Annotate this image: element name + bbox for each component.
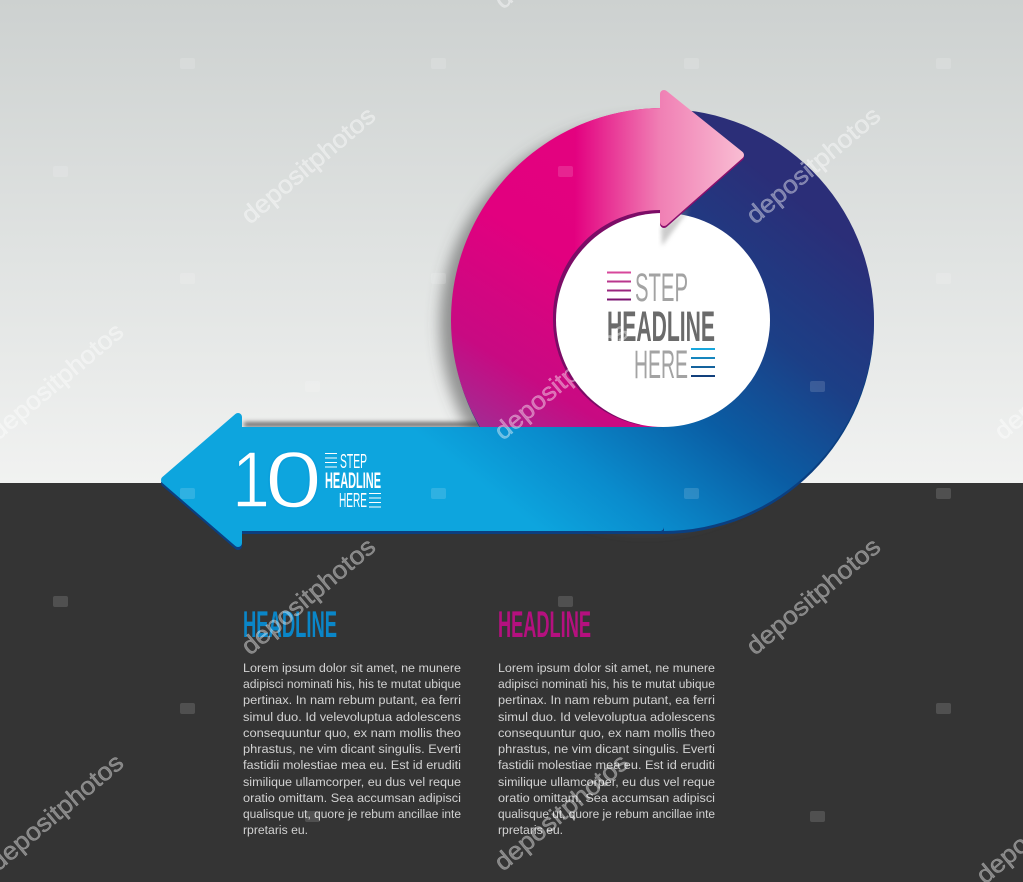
- left body text: Lorem ipsum dolor sit amet, ne munere: [243, 661, 461, 675]
- left body text: similique ullamcorper, eu dus vel reque: [243, 775, 461, 789]
- center label: [607, 266, 715, 387]
- left body text: pertinax. In nam rebum putant, ea ferri: [243, 693, 461, 707]
- left body text: [243, 661, 461, 837]
- center label: HERE: [634, 343, 688, 387]
- shadow under arrow head: [661, 208, 690, 246]
- pink arrow neck: [575, 108, 660, 245]
- left body text: oratio omittam. Sea accumsan adipisci: [243, 791, 461, 805]
- background: dark lower area: [0, 483, 1023, 882]
- right body text: phrastus, ne vim dicant singulis. Everti: [498, 742, 715, 756]
- watermarks: depositphotos: [489, 748, 634, 877]
- right body text: oratio omittam. Sea accumsan adipisci: [498, 791, 715, 805]
- blue ring: [452, 109, 874, 531]
- white inner circle: [556, 213, 770, 427]
- left body text: simul duo. Id velevoluptua adolescens: [243, 710, 461, 724]
- pink arrow head: [664, 94, 740, 222]
- ring lower edge: [452, 112, 874, 534]
- watermarks: depositphotos: [741, 532, 886, 661]
- pink arrow head edge: [664, 96, 740, 224]
- bars right of here: [691, 349, 715, 376]
- watermarks: depositphotos: [489, 317, 634, 446]
- right body text: rpretaris eu.: [498, 823, 563, 837]
- right body text: consequuntur quo, ex nam mollis theo: [498, 726, 715, 740]
- number ten: 1: [232, 435, 270, 524]
- step text: STEP: [635, 266, 688, 310]
- watermark camera icons: [53, 58, 951, 822]
- right text column: [498, 604, 715, 837]
- bars left of step: [607, 272, 631, 300]
- left body text: fastidii molestiae mea eu. Est id eruditi: [243, 758, 461, 772]
- right body text: fastidii molestiae mea eu. Est id eruditi: [498, 758, 715, 772]
- right body text: qualisque ut, quore je rebum ancillae inte: [498, 807, 715, 821]
- pink ring segment: [451, 108, 663, 427]
- right body text: simul duo. Id velevoluptua adolescens: [498, 710, 715, 724]
- arrow label: [232, 435, 381, 524]
- blue left arrow: [165, 417, 660, 543]
- small bars right: [369, 494, 381, 507]
- small here text: HERE: [339, 490, 367, 512]
- text: HEADLINE: [607, 303, 715, 351]
- shadow of circle: [440, 120, 850, 530]
- watermarks: depositphotos: [236, 532, 381, 661]
- right body text: pertinax. In nam rebum putant, ea ferri: [498, 693, 715, 707]
- right body text: adipisci nominati his, his te mutat ubique: [498, 677, 715, 691]
- right body text: [498, 661, 715, 837]
- right body text: similique ullamcorper, eu dus vel reque: [498, 775, 715, 789]
- left body text: phrastus, ne vim dicant singulis. Everti: [243, 742, 461, 756]
- left body text: consequuntur quo, ex nam mollis theo: [243, 726, 461, 740]
- left text column: HEADLINE: [243, 604, 337, 645]
- background: light upper area: [0, 0, 1023, 483]
- left body text: adipisci nominati his, his te mutat ubique: [243, 677, 461, 691]
- small step text: STEP: [340, 451, 367, 473]
- arrow band edge: [165, 420, 660, 546]
- circular arrow: [165, 94, 874, 546]
- right text column: HEADLINE: [498, 604, 591, 645]
- left text column: [243, 604, 461, 837]
- number ten: 0: [265, 435, 322, 524]
- text: HEADLINE: [325, 468, 381, 493]
- left body text: qualisque ut, quore je rebum ancillae inte: [243, 807, 461, 821]
- shadow above arrow band: [244, 422, 494, 427]
- watermarks: depositphotos: [741, 101, 886, 230]
- watermarks: depositphotos: [236, 101, 381, 230]
- small bars left: [325, 454, 337, 467]
- right body text: Lorem ipsum dolor sit amet, ne munere: [498, 661, 715, 675]
- left body text: rpretaris eu.: [243, 823, 308, 837]
- inner circle shadow crescent: [553, 210, 663, 425]
